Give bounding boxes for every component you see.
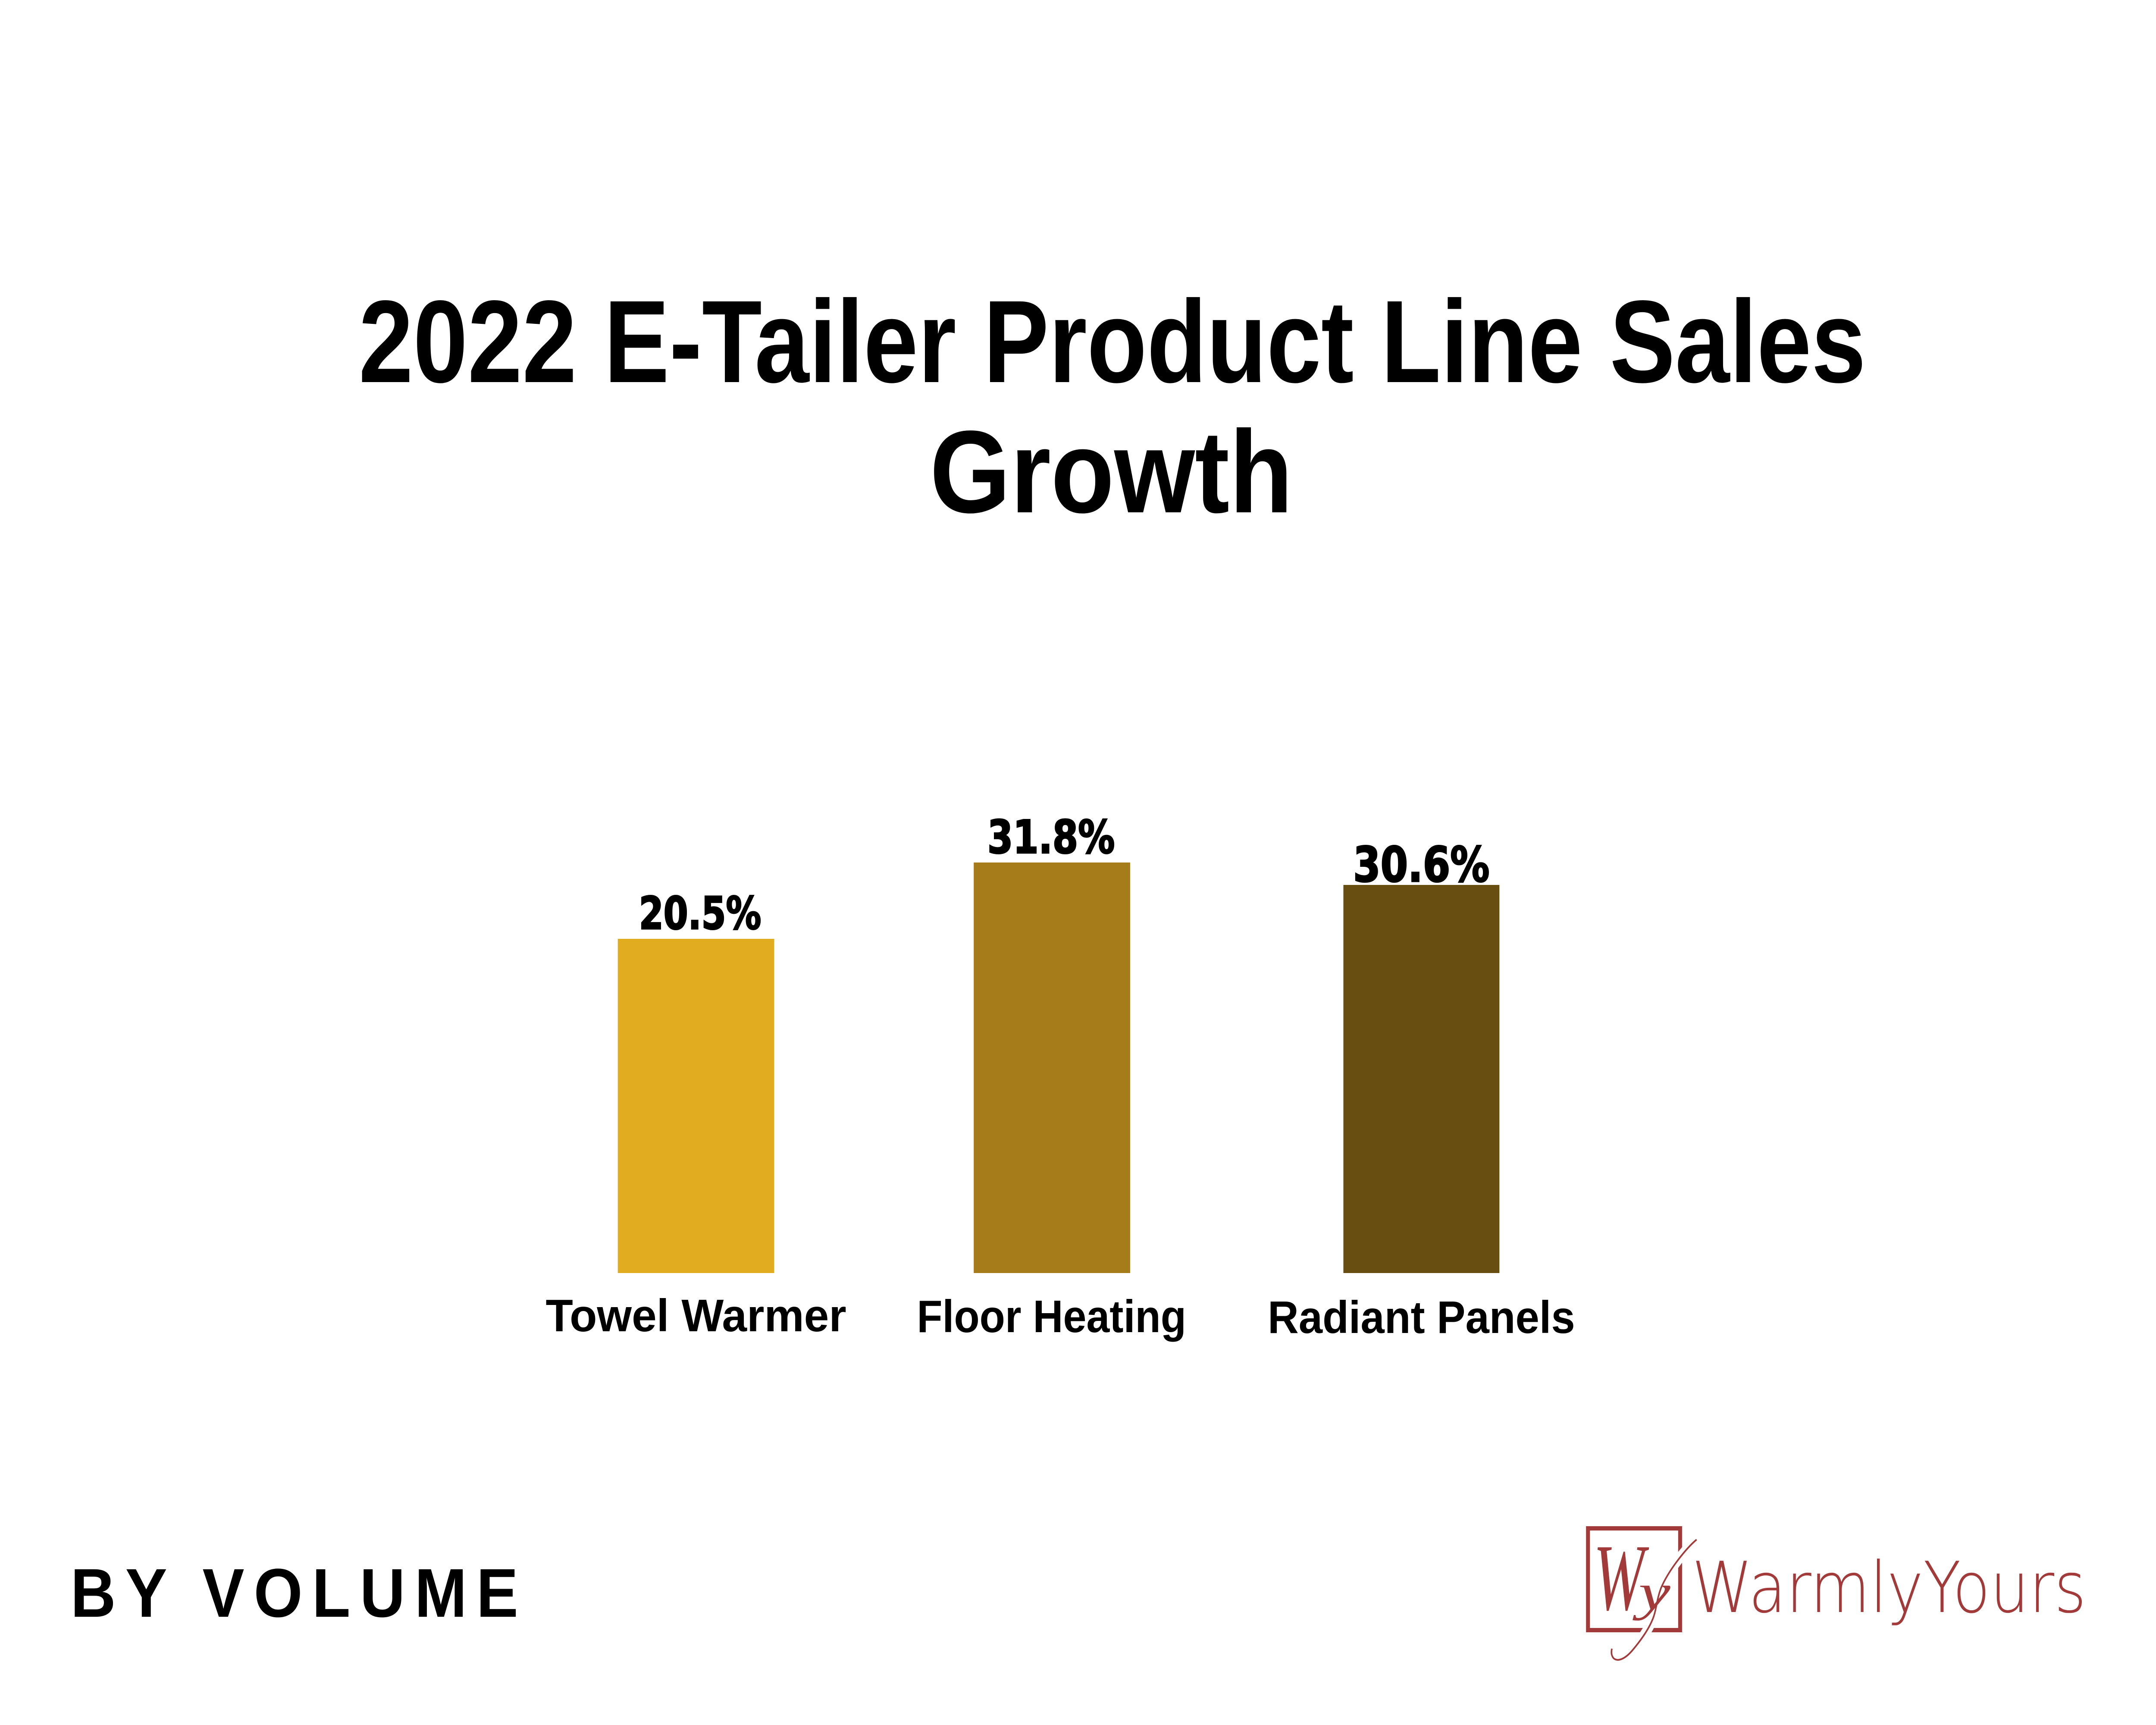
bar: Floor Heating: Floor Heating — [917, 1291, 1186, 1342]
bar: Floor Heating — [917, 811, 1186, 1342]
bar: Radiant Panels: Radiant Panels — [1268, 1292, 1575, 1343]
caption: by volume: BY VOLUME — [71, 1555, 518, 1632]
bar: Radiant Panels: 30.6% — [1353, 837, 1490, 893]
title — [359, 276, 1866, 538]
bar: Floor Heating: 31.8% — [987, 811, 1115, 864]
logo monogram y: y — [1633, 1563, 1670, 1621]
bar: Towel Warmer: Towel Warmer — [545, 1290, 846, 1341]
bar chart — [545, 811, 1575, 1343]
bar: Radiant Panels — [1268, 837, 1575, 1343]
logo swash — [1611, 1540, 1697, 1660]
logo wordmark: WarmlyYours — [1692, 1546, 2086, 1629]
logo frame gap — [1633, 1540, 1697, 1650]
bar: Towel Warmer: 20.5% — [639, 888, 761, 940]
bar: Towel Warmer — [545, 888, 846, 1341]
logo: WarmlyYours — [1588, 1525, 2086, 1660]
title: Growth — [930, 407, 1293, 538]
logo monogram W: W — [1593, 1525, 1649, 1630]
logo frame — [1588, 1528, 1680, 1630]
title: 2022 E-Tailer Product Line Sales — [359, 276, 1866, 408]
